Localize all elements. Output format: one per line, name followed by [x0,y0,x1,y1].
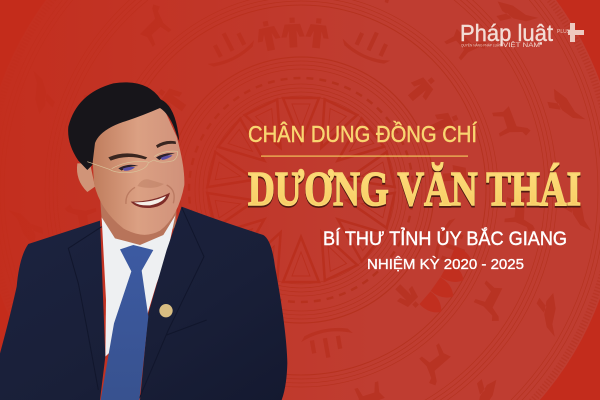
glasses [87,151,177,173]
gold divider [261,156,468,157]
ear [77,163,95,192]
lapel pin [159,304,173,317]
logo: Pháp luật Plus: Pháp luật [460,20,554,46]
eye glare [123,155,173,171]
lapels [68,207,207,398]
tie [101,245,153,400]
nose shadow [137,179,164,188]
hair [68,82,179,170]
eyebrows [108,141,176,161]
logo: Pháp luật Plus: VIỆT NAM [503,40,540,49]
face [92,100,184,235]
smile lines [126,185,174,204]
logo: Pháp luật Plus: QUYỀN NĂNG PHÁP LUẬT [461,42,502,48]
headline: portrait of comrade: CHÂN DUNG ĐỒNG CHÍ [248,120,478,147]
logo: Pháp luật Plus: PLUS [557,29,571,35]
suit jacket [0,207,287,400]
smile [131,193,170,208]
shirt [102,215,175,357]
portrait: man in dark suit [0,82,287,400]
term: NHIỆM KỲ 2020 - 2025 [367,256,524,273]
position: BÍ THƯ TỈNH ỦY BẮC GIANG [323,228,567,250]
eye creases [118,153,175,171]
neck [100,197,177,250]
